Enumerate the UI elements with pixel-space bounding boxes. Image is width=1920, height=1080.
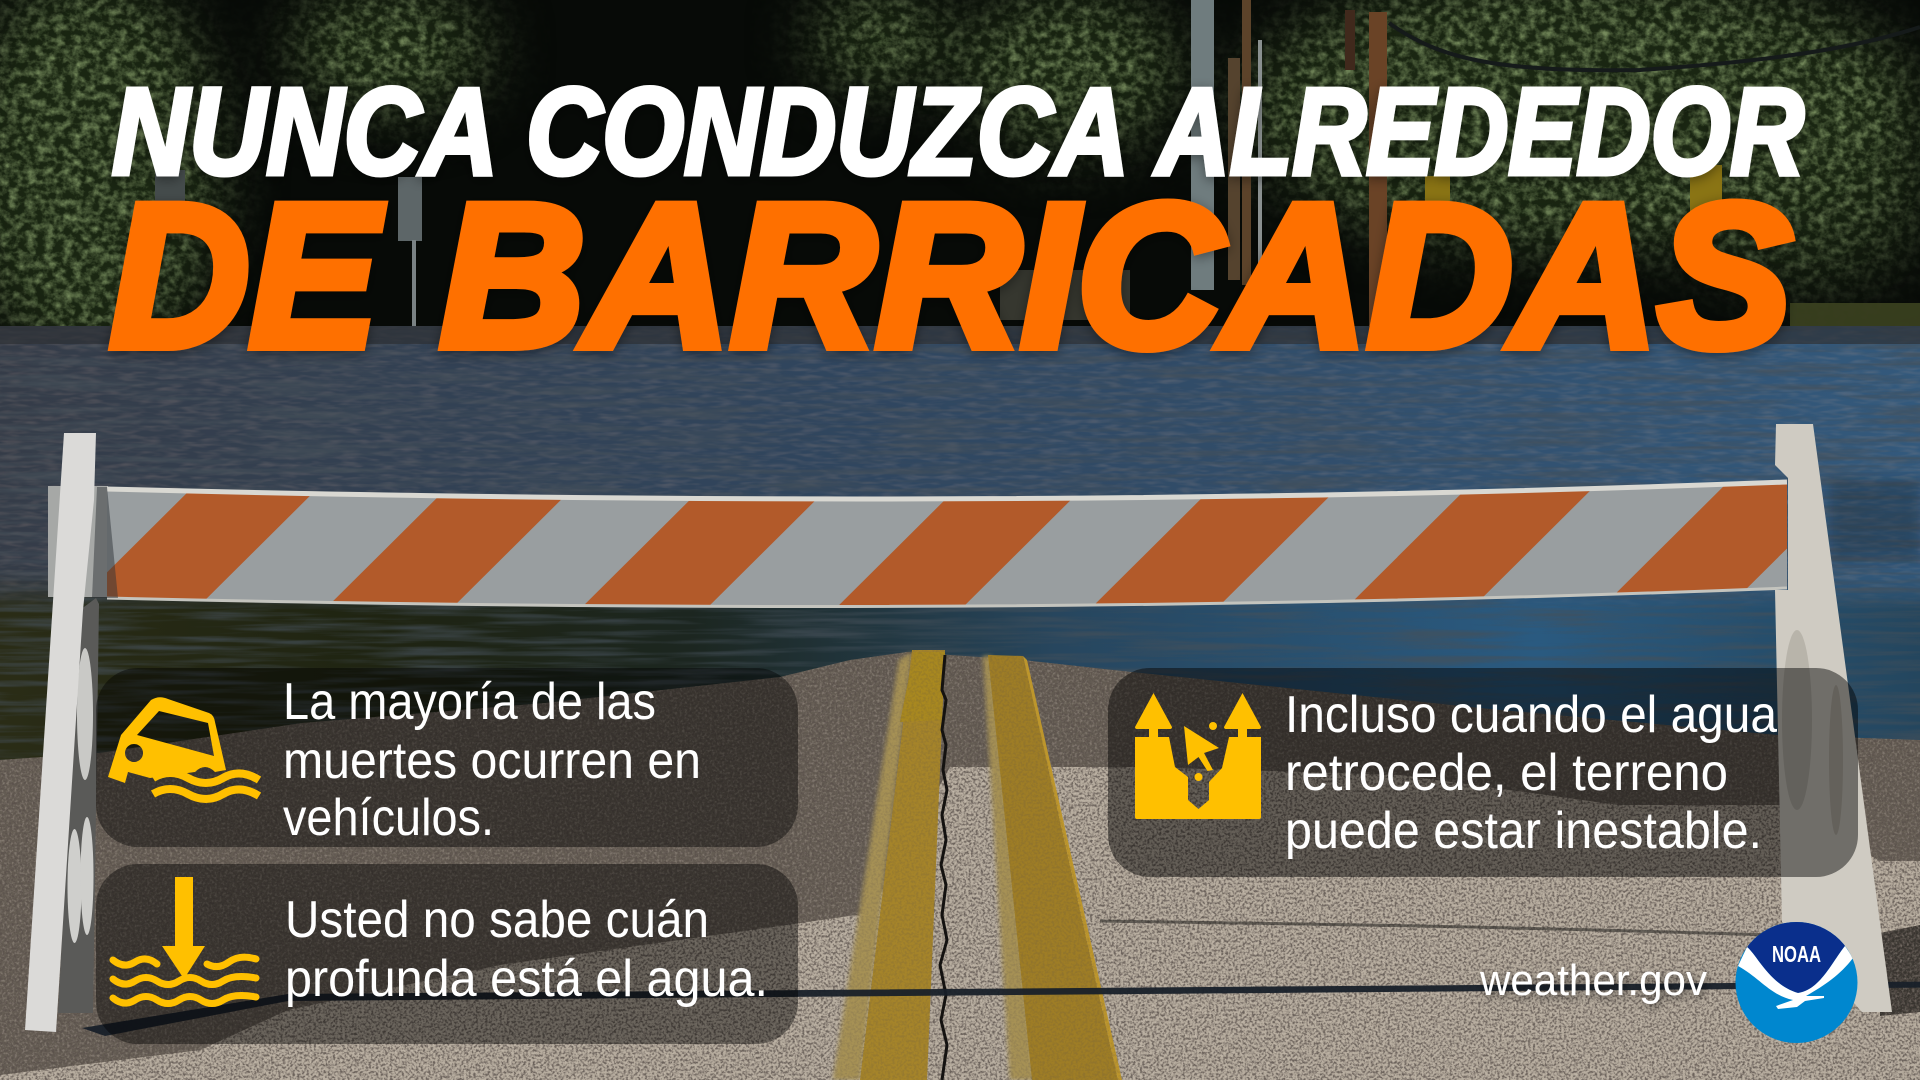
panel: unstable ground bbox=[1108, 668, 1858, 877]
text: ground: Incluso cuando el agua bbox=[1285, 686, 1777, 744]
NOAA logo bbox=[1736, 922, 1858, 1043]
text: depth bbox=[285, 891, 768, 1008]
text: depth: profunda está el agua. bbox=[285, 950, 768, 1008]
gravel road bbox=[0, 640, 1920, 1080]
title line 2: BARRICADAS bbox=[440, 162, 1792, 390]
website label: weather.gov bbox=[1479, 956, 1707, 1005]
barricade rail: orange and white stripes bbox=[48, 480, 1788, 608]
text: deaths: vehículos. bbox=[283, 789, 494, 847]
logo wordmark: NOAA bbox=[1772, 941, 1821, 967]
title line 1: CONDUZCA bbox=[526, 64, 1129, 201]
text: ground bbox=[1285, 686, 1777, 860]
text: depth: Usted no sabe cuán bbox=[285, 891, 709, 949]
text: deaths: muertes ocurren en bbox=[283, 732, 701, 790]
title line 1 bbox=[112, 64, 1804, 201]
trees and utility poles bbox=[0, 0, 1920, 345]
title line 1: NUNCA bbox=[112, 64, 498, 201]
double yellow centre line bbox=[831, 650, 1122, 1080]
text: deaths: La mayoría de las bbox=[283, 673, 656, 731]
floodwater bbox=[0, 326, 1920, 760]
text: ground: retrocede, el terreno bbox=[1285, 744, 1728, 802]
long bar shadow on road bbox=[82, 981, 1920, 1036]
icon: car sinking in water bbox=[108, 697, 259, 799]
title line 1: ALREDEDOR bbox=[1154, 64, 1804, 201]
text: ground: puede estar inestable. bbox=[1285, 802, 1762, 860]
right post bbox=[1775, 424, 1892, 1012]
panel: deaths in vehicles bbox=[96, 668, 798, 847]
title line 2: DE bbox=[110, 162, 384, 390]
road cracks bbox=[1100, 921, 1800, 936]
barricade bbox=[25, 424, 1892, 1032]
icon: arrow into waves bbox=[113, 877, 256, 1004]
title: two lines bbox=[110, 64, 1804, 390]
icon: cracked ground with arrows bbox=[1135, 693, 1261, 819]
panel: water depth unknown bbox=[96, 864, 798, 1044]
text: deaths bbox=[283, 673, 701, 847]
left post bbox=[25, 433, 99, 1032]
